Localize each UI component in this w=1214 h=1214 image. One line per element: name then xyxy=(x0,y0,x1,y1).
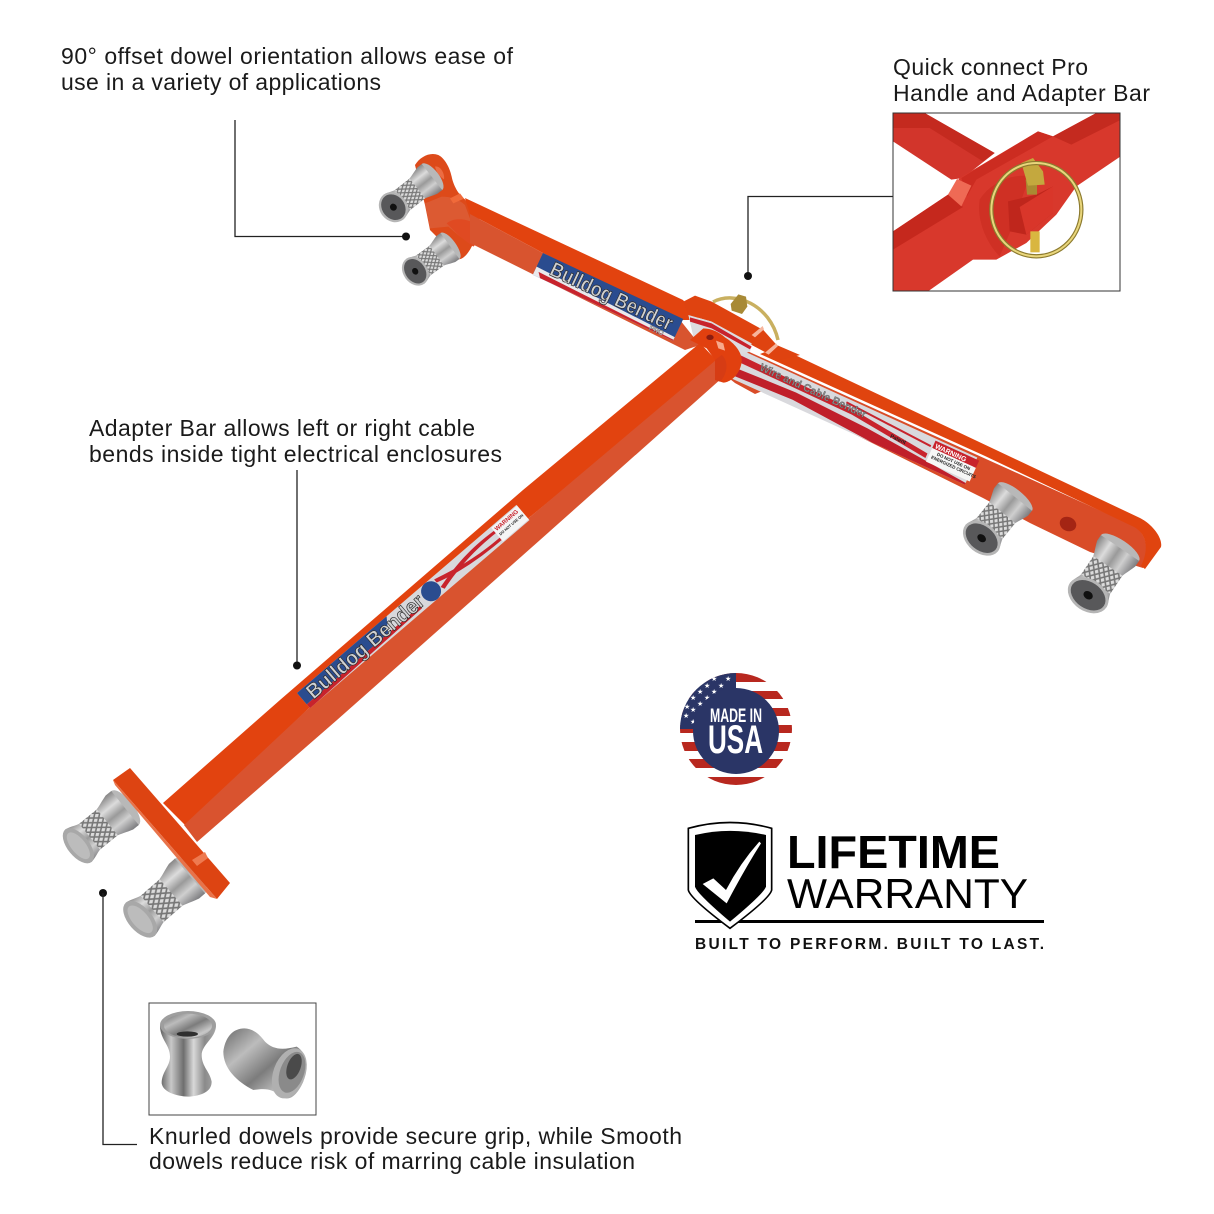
shield icon xyxy=(688,822,772,928)
sticker usa seal xyxy=(417,577,445,605)
stars: ★ xyxy=(711,675,717,683)
knurled dowel: bottom rear xyxy=(56,786,145,870)
stars: ★ xyxy=(684,703,690,711)
callout: knurled dowels text: Knurled dowels provide secure grip, while Smooth xyxy=(149,1123,682,1149)
check mark xyxy=(703,842,761,903)
callout: quick connect text: Handle and Adapter Bar xyxy=(893,80,1150,106)
band mini logo: Patent xyxy=(889,434,907,446)
sticker warning xyxy=(491,506,529,541)
leader line: adapter bar xyxy=(293,470,301,670)
stars: ★ xyxy=(697,700,703,708)
stars: ★ xyxy=(718,682,724,690)
smooth dowel upright xyxy=(160,1011,216,1097)
lifetime heading: LIFETIME xyxy=(787,826,1000,878)
inset border xyxy=(893,113,1120,291)
knurled dowel: top rear xyxy=(372,160,448,229)
handle top face xyxy=(465,198,700,320)
stars: ★ xyxy=(690,706,696,714)
warning label: WARNING xyxy=(934,443,968,464)
leader line: knurled dowels xyxy=(99,889,137,1144)
badge center disc xyxy=(693,688,779,774)
handle end plate xyxy=(415,154,487,259)
mounting hole xyxy=(1057,514,1079,534)
handle front face left xyxy=(470,214,700,350)
inset photo: smooth dowels xyxy=(149,1003,316,1115)
gold lock ring xyxy=(713,298,778,340)
stars: ★ xyxy=(690,694,696,702)
adapter bar top face xyxy=(163,343,718,827)
knurled dowel: right inner xyxy=(955,477,1037,563)
handle top face right xyxy=(760,347,1161,569)
knurled dowel: top front xyxy=(396,229,464,291)
callout: adapter bar text: Adapter Bar allows left or right cable xyxy=(89,415,475,441)
sticker wordmark: Bulldog Bender xyxy=(546,258,676,335)
sticker: wire and cable bender band xyxy=(725,348,983,488)
inset image xyxy=(894,114,1120,290)
knurled dowel: right outer xyxy=(1060,529,1144,621)
warning label: DO NOT USE ON xyxy=(936,452,971,471)
stars: ★ xyxy=(690,718,696,726)
sticker model: PRO xyxy=(648,325,665,338)
adapter sticker wordmark: Bulldog Bender xyxy=(302,590,429,704)
leader line: dowel orientation xyxy=(235,120,410,240)
knurled dowel: bottom front xyxy=(116,853,212,944)
sticker: bulldog bender handle xyxy=(532,252,684,343)
stars: ★ xyxy=(725,675,731,683)
product: bender handle bar xyxy=(415,154,1161,569)
stars: ★ xyxy=(704,682,710,690)
callout: dowel orientation text: 90° offset dowel orientation allows ease of xyxy=(61,43,514,69)
stars: ★ xyxy=(704,694,710,702)
callout: dowel orientation text: use in a variety of applications xyxy=(61,69,381,95)
adapter bar side face xyxy=(184,360,722,842)
inset photo: quick connect xyxy=(893,113,1120,291)
badge: made in usa xyxy=(680,673,792,785)
stars: ★ xyxy=(697,688,703,696)
badge: lifetime warranty xyxy=(688,822,1044,953)
callout: quick connect text: Quick connect Pro xyxy=(893,54,1088,80)
stars xyxy=(683,675,731,726)
sticker warning: DO NOT USE ON xyxy=(499,513,525,536)
adapter bar end plate xyxy=(113,768,230,899)
handle hub sleeve xyxy=(683,294,800,360)
hub shackle nut xyxy=(731,294,747,314)
sticker warning: WARNING xyxy=(494,509,520,533)
warning label xyxy=(926,441,983,483)
collar hole xyxy=(706,335,714,340)
callout: knurled dowels text: dowels reduce risk of marring cable insulation xyxy=(149,1148,635,1174)
badge text: usa: USA xyxy=(708,718,763,762)
leader line: quick connect xyxy=(744,196,893,280)
badge text: made in: MADE IN xyxy=(710,706,762,727)
product: adapter bar xyxy=(163,328,742,842)
stars: ★ xyxy=(711,688,717,696)
smooth dowel tilted xyxy=(223,1028,313,1103)
adapter collar xyxy=(690,328,742,383)
warning label: ENERGIZED CIRCUITS xyxy=(930,455,977,479)
rule xyxy=(695,920,1044,923)
stars: ★ xyxy=(683,712,689,720)
warranty heading: WARRANTY xyxy=(787,870,1028,917)
tagline: BUILT TO PERFORM. BUILT TO LAST. xyxy=(695,936,1044,953)
band label: Wire and Cable Bender xyxy=(758,362,869,421)
callout: adapter bar text: bends inside tight electrical enclosures xyxy=(89,441,502,467)
adapter sticker xyxy=(296,503,530,709)
handle front face right xyxy=(725,350,1146,568)
